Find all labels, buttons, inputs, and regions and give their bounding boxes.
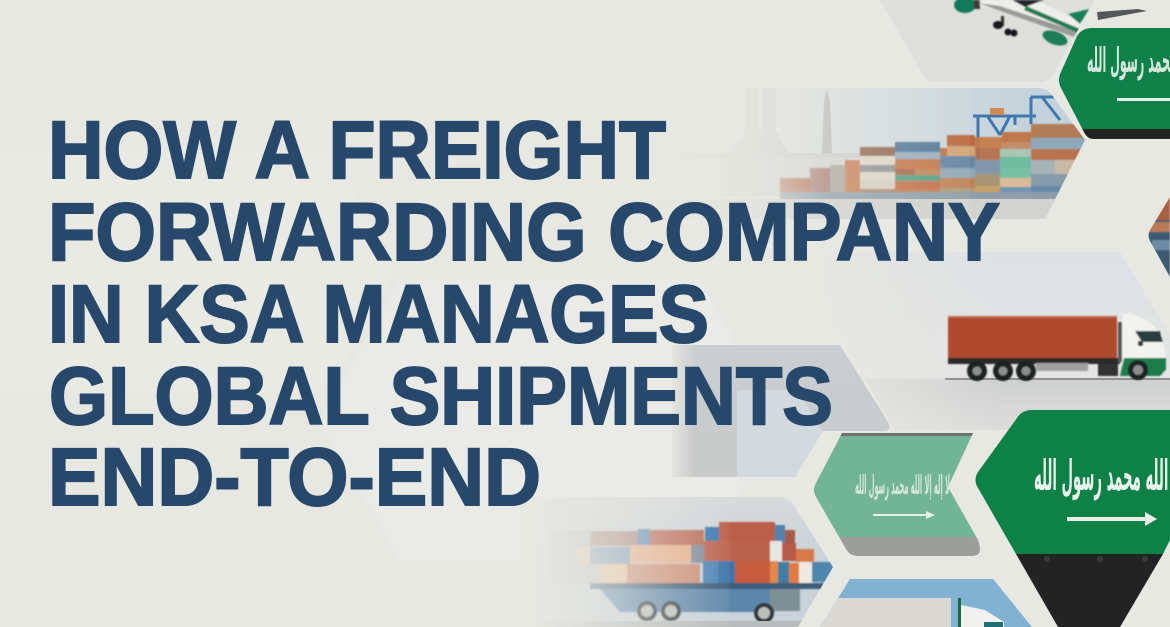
title: FORWARDING COMPANY bbox=[48, 187, 1000, 278]
panel: bottom container truck hexagon bbox=[557, 497, 833, 627]
title: HOW A FREIGHT bbox=[48, 105, 666, 196]
white trailer bbox=[815, 598, 951, 627]
flatbed bbox=[590, 583, 830, 589]
chimneys and tower bbox=[782, 144, 788, 153]
title: END-TO-END bbox=[48, 432, 541, 523]
white cab bbox=[961, 605, 1004, 627]
crane 1 bbox=[973, 97, 1068, 160]
wheels bbox=[639, 603, 772, 621]
panel: top flag hexagon bbox=[1050, 28, 1170, 139]
container stacks bbox=[780, 124, 1087, 200]
title bbox=[48, 105, 1000, 523]
truck ground line bbox=[945, 378, 1170, 380]
title: IN KSA MANAGES bbox=[48, 269, 709, 360]
ground bbox=[592, 621, 802, 627]
icon: container truck bbox=[948, 313, 1166, 381]
truck cab bbox=[1122, 313, 1166, 376]
title: GLOBAL SHIPMENTS bbox=[49, 351, 833, 442]
truck body bbox=[600, 589, 775, 612]
panel: mid flag hexagon bbox=[810, 433, 985, 556]
red shipping container bbox=[948, 316, 1117, 358]
truck wheels bbox=[967, 360, 1148, 381]
panel: plane hexagon bbox=[880, 0, 1147, 82]
panel: large flag hexagon bbox=[970, 410, 1170, 627]
panel: truck hexagon bbox=[800, 252, 1170, 432]
mid flag arrow bbox=[873, 511, 935, 519]
panel: small container hexagon bbox=[1148, 197, 1170, 277]
flag rivets bbox=[1044, 556, 1148, 562]
icon: cargo plane bbox=[954, 0, 1089, 49]
panel: port hexagon bbox=[772, 88, 1085, 219]
flag arrow bbox=[1117, 98, 1170, 101]
panel: warehouse window hexagon bbox=[672, 345, 889, 477]
plane wing tip bbox=[1097, 9, 1147, 20]
truck chassis bbox=[948, 358, 1120, 364]
bridge bbox=[784, 153, 860, 158]
window panes bbox=[684, 430, 737, 477]
stacked containers bbox=[550, 522, 834, 621]
large flag arrow bbox=[1067, 512, 1157, 526]
panel: bottom white truck hexagon bbox=[815, 579, 1035, 627]
quay ground bbox=[780, 199, 1055, 219]
